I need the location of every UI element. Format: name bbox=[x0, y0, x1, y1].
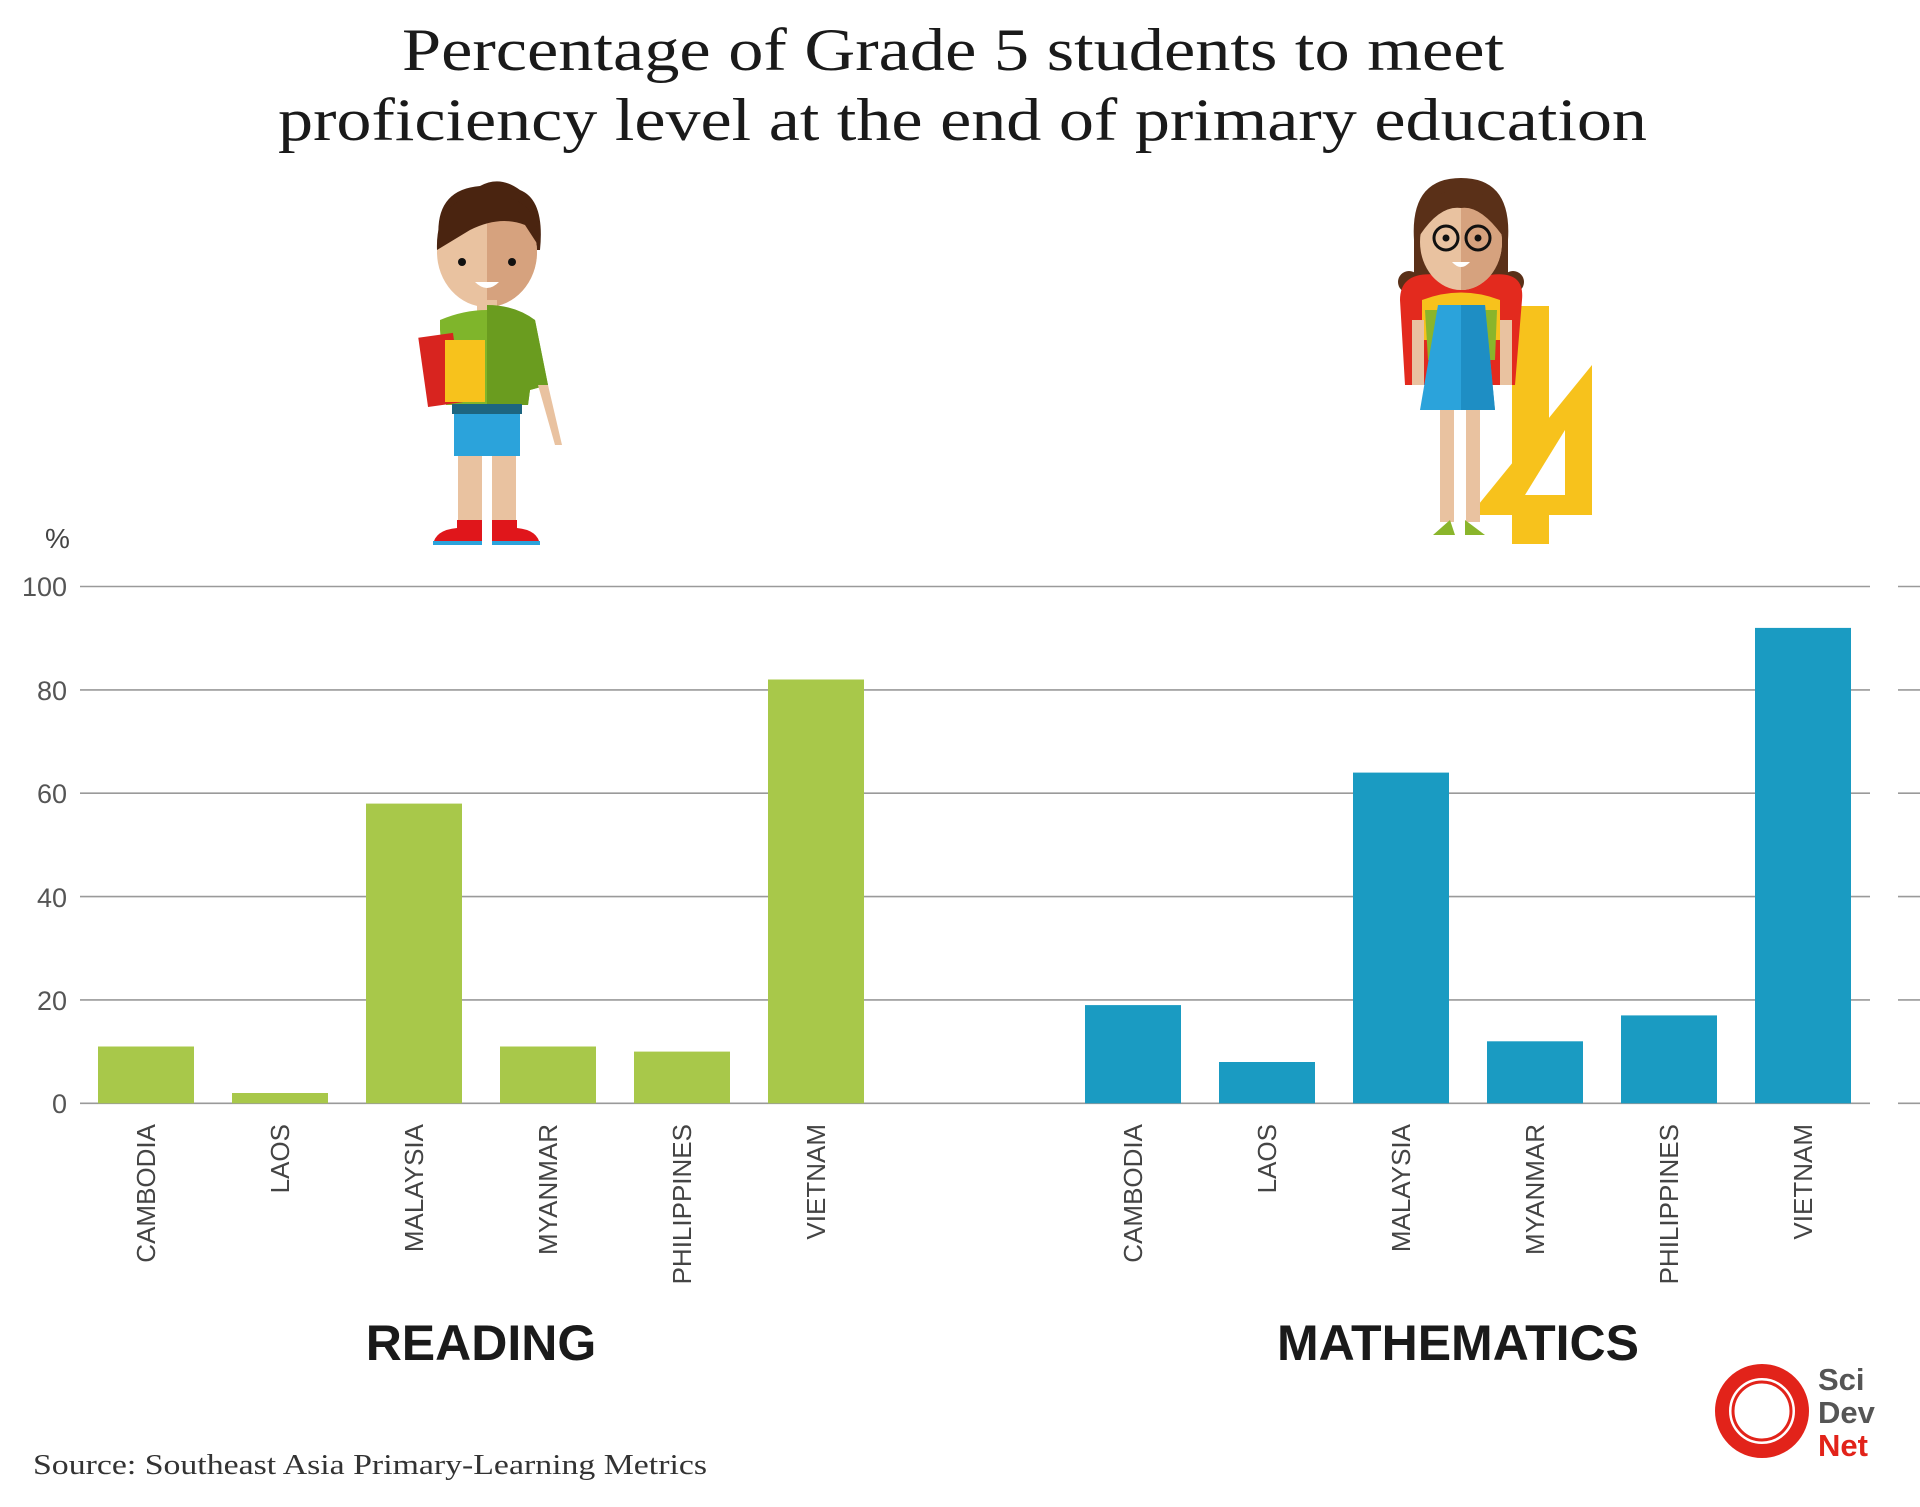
title bbox=[278, 17, 1647, 153]
grid lines bbox=[80, 586, 1920, 1103]
logo: SciDevNet: Dev bbox=[1818, 1395, 1876, 1430]
country labels: MALAYSIA bbox=[399, 1123, 429, 1252]
country labels: CAMBODIA bbox=[1118, 1123, 1148, 1263]
country labels: VIETNAM bbox=[1788, 1124, 1818, 1240]
y axis labels: 100 bbox=[22, 572, 67, 602]
icon: boy with books bbox=[418, 181, 562, 545]
y axis labels: 20 bbox=[37, 986, 67, 1016]
logo: SciDevNet: Sci bbox=[1818, 1362, 1865, 1397]
icon: girl with ruler bbox=[1398, 178, 1592, 544]
logo: SciDevNet: Net bbox=[1818, 1428, 1868, 1463]
heading: mathematics: MATHEMATICS bbox=[1277, 1315, 1639, 1371]
bar chart: mathematics bbox=[1085, 628, 1851, 1103]
country labels: CAMBODIA bbox=[131, 1123, 161, 1263]
country labels: MALAYSIA bbox=[1386, 1123, 1416, 1252]
y axis labels: 80 bbox=[37, 676, 67, 706]
title: Percentage of Grade 5 students to meet bbox=[402, 17, 1504, 83]
country labels: MYANMAR bbox=[1520, 1124, 1550, 1255]
title: proficiency level at the end of primary education bbox=[278, 87, 1647, 153]
heading: reading: READING bbox=[366, 1315, 596, 1371]
y axis unit: % bbox=[45, 523, 70, 554]
country labels: LAOS bbox=[1252, 1124, 1282, 1193]
source: Source: Southeast Asia Primary-Learning Metrics bbox=[33, 1449, 707, 1481]
country labels: MYANMAR bbox=[533, 1124, 563, 1255]
country labels: PHILIPPINES bbox=[1654, 1124, 1684, 1284]
y axis labels: 40 bbox=[37, 883, 67, 913]
bar chart: reading bbox=[98, 680, 864, 1103]
y axis labels: 0 bbox=[52, 1089, 67, 1119]
country labels: VIETNAM bbox=[801, 1124, 831, 1240]
country labels: PHILIPPINES bbox=[667, 1124, 697, 1284]
country labels: LAOS bbox=[265, 1124, 295, 1193]
y axis labels bbox=[22, 572, 67, 1119]
logo: SciDevNet bbox=[1722, 1362, 1876, 1463]
country labels bbox=[131, 1123, 1818, 1284]
y axis labels: 60 bbox=[37, 779, 67, 809]
